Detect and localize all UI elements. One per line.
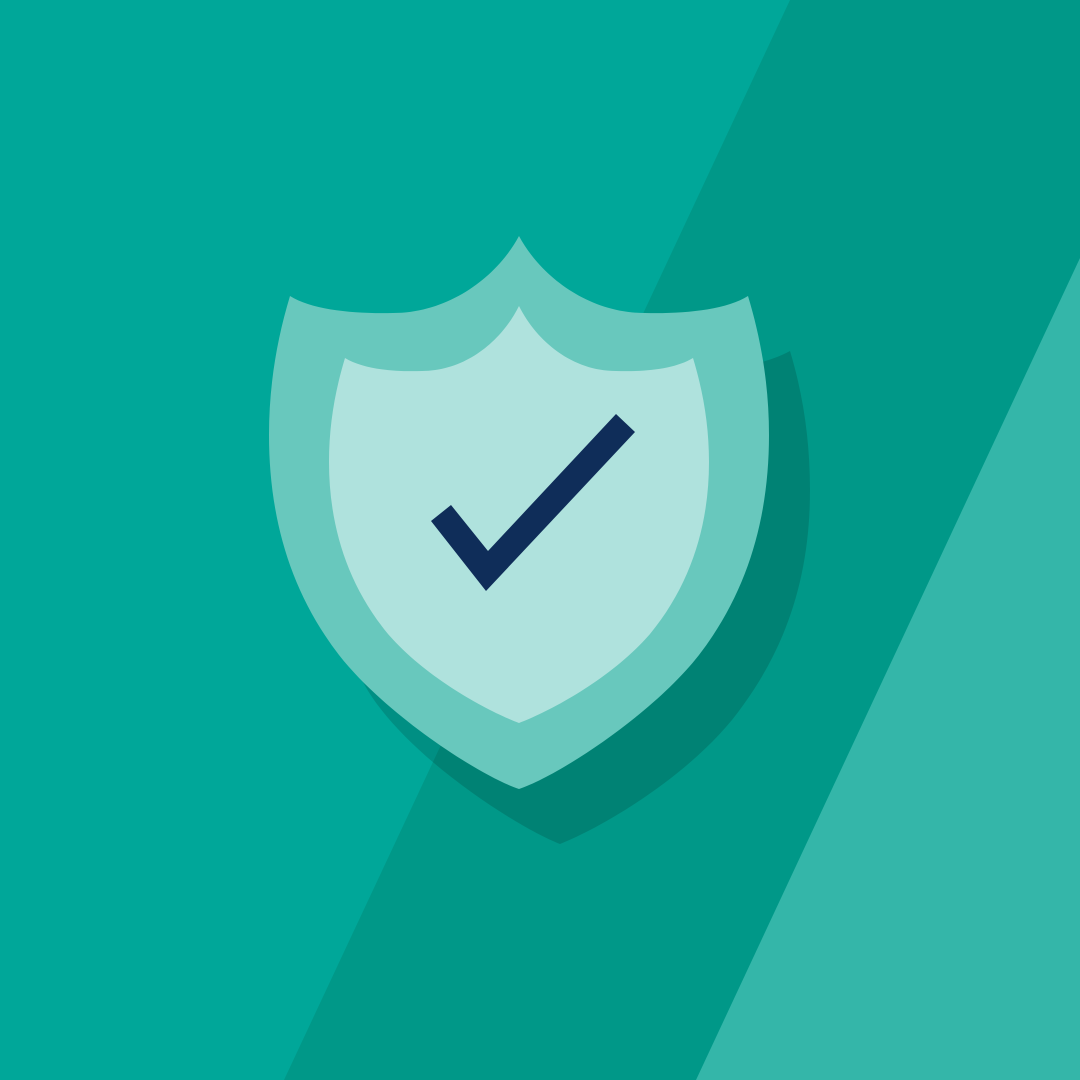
- shield outer: [269, 236, 769, 789]
- shield inner: [329, 306, 709, 723]
- icon: check mark: [431, 414, 635, 591]
- diagonal band: dark teal: [284, 0, 1080, 1080]
- shield shadow: [362, 351, 810, 844]
- diagonal band: light teal: [696, 258, 1080, 1080]
